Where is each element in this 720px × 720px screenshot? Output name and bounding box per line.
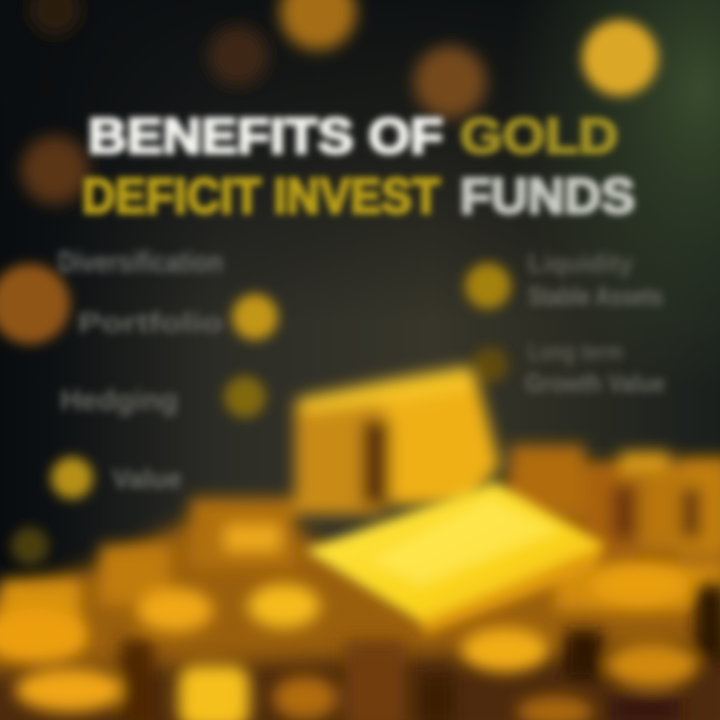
front highlighted gold bar xyxy=(305,482,605,635)
stacked bars back xyxy=(0,366,720,650)
pile base xyxy=(0,460,720,720)
title: DEFICIT INVEST xyxy=(82,168,440,224)
foreground gold bars xyxy=(0,565,720,720)
decorative gold bokeh circles xyxy=(0,0,658,344)
icon: benefit 1 bullet xyxy=(232,294,278,340)
benefit 1 text: Portfolio xyxy=(78,307,223,338)
gold bars pile xyxy=(0,366,720,720)
left benefits list xyxy=(11,246,278,565)
right benefit 2 text: Growth Value xyxy=(525,368,665,398)
icon: right benefit 2 bullet xyxy=(472,347,508,383)
icon: benefit 2 bullet xyxy=(224,376,266,418)
right benefit 1 text: Liquidity xyxy=(528,248,634,278)
benefit 2 text: Hedging xyxy=(60,384,178,417)
benefit 3 text: Value xyxy=(112,463,182,494)
right benefit 1 text xyxy=(528,248,663,311)
right benefit 1 text: Stable Assets xyxy=(528,281,663,311)
right benefits list xyxy=(465,248,665,398)
title: FUNDS xyxy=(460,168,635,224)
icon: right benefit 1 bullet xyxy=(465,263,511,309)
title xyxy=(82,108,635,224)
right benefit 2 text xyxy=(525,339,665,398)
benefit 1 text: Diversification xyxy=(58,246,223,279)
title: BENEFITS OF xyxy=(88,108,443,164)
icon: benefit 3 bullet xyxy=(51,457,93,499)
icon: benefit 4 bullet xyxy=(11,527,49,565)
right benefit 2 text: Long term xyxy=(528,339,623,366)
title: GOLD xyxy=(460,108,618,164)
benefit 1 text xyxy=(58,246,223,338)
